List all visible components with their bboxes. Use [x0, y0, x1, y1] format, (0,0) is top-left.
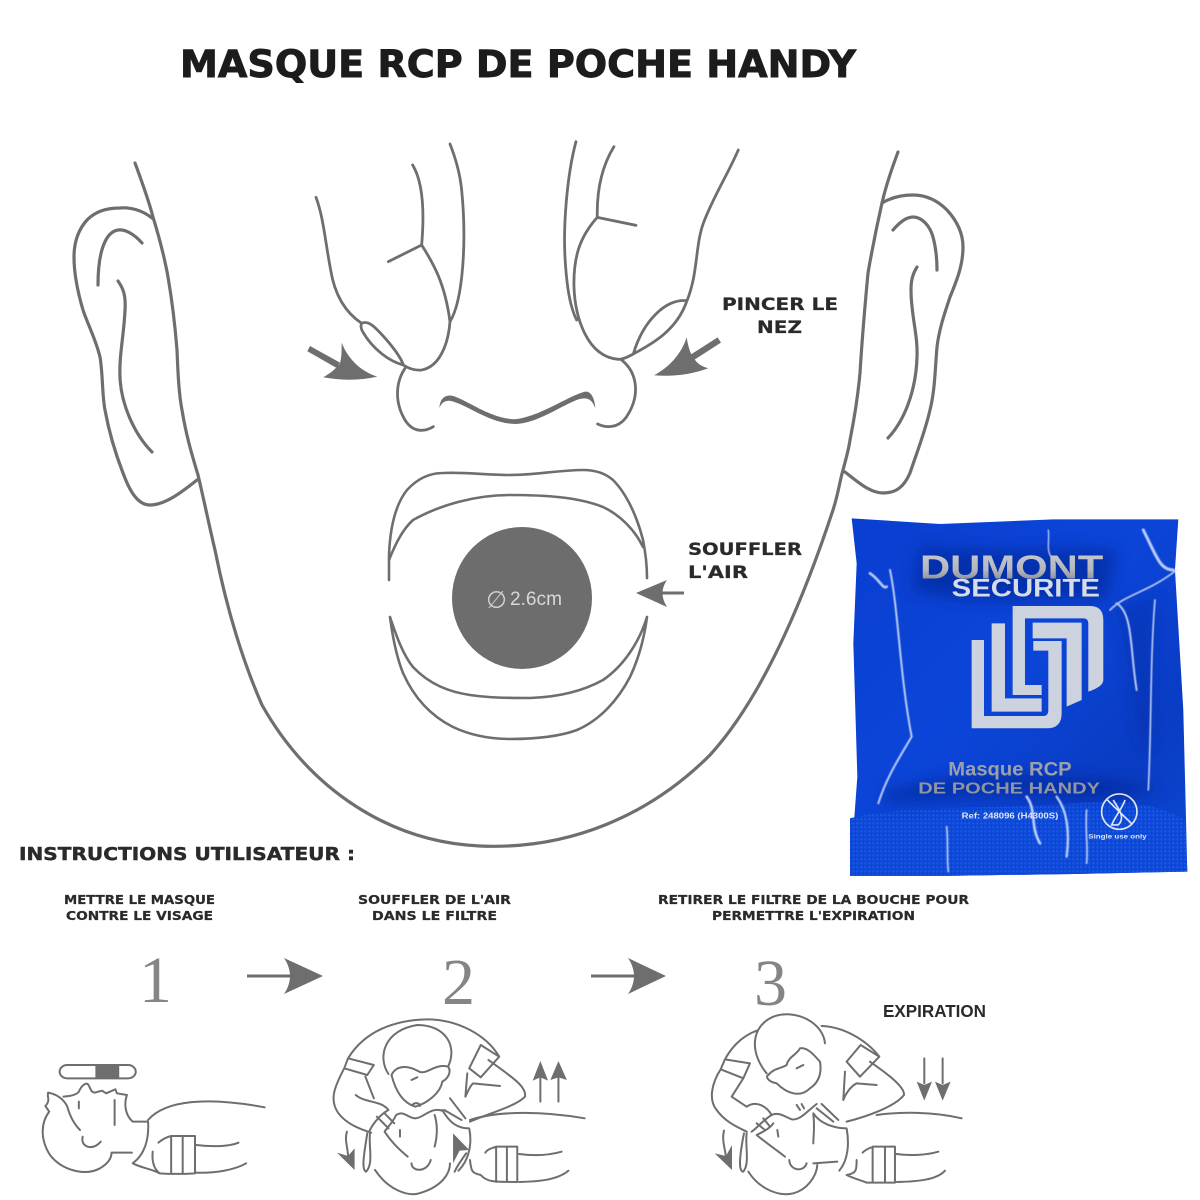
step 2 caption: DANS LE FILTRE: [372, 908, 497, 923]
label: souffler l'air: L'AIR: [688, 563, 748, 583]
nose: [397, 360, 636, 430]
fingers and nose: [307, 142, 738, 430]
step 2 caption: [358, 892, 511, 923]
single use symbol: [1088, 794, 1147, 840]
left pinch arrow: [307, 343, 377, 380]
brand name: SECURITE: [952, 575, 1100, 603]
dark shading: [883, 547, 1160, 803]
brand name: DUMONT: [920, 549, 1103, 586]
step number 1: 1: [139, 944, 172, 1017]
arrow 2 to 3: [591, 958, 666, 994]
patient and mask: [363, 1110, 585, 1194]
label: pincer le nez: NEZ: [757, 318, 802, 338]
rescuer: [334, 1019, 525, 1133]
blow arrow: [636, 580, 684, 607]
step 1 caption: [64, 892, 215, 923]
left ear: [74, 208, 197, 505]
down arrows: [917, 1058, 951, 1101]
reference: Ref: 248096 (H4300S): [962, 810, 1059, 820]
arrow 1 to 2: [247, 958, 323, 994]
instructions heading: INSTRUCTIONS UTILISATEUR :: [19, 845, 355, 865]
right pinch arrow: [654, 337, 721, 376]
patient and mask: [740, 1104, 962, 1194]
step 3 caption: [658, 892, 969, 923]
illustration: step 3 rescuer lifting away: [712, 1014, 962, 1194]
step 3 caption: RETIRER LE FILTRE DE LA BOUCHE POUR: [658, 892, 969, 907]
label: pincer le nez: PINCER LE: [722, 295, 838, 315]
step number 3: 3: [754, 947, 787, 1020]
step 1 caption: METTRE LE MASQUE: [64, 892, 215, 907]
product name: [918, 760, 1100, 797]
foil highlights: [870, 530, 1177, 872]
illustration: step 1 patient and mask: [43, 1065, 265, 1174]
product pouch: [850, 518, 1187, 876]
filter circle with diameter: ∅: [486, 586, 507, 614]
expiration label: EXPIRATION: [883, 1001, 986, 1021]
textured seal: [850, 802, 1187, 876]
pouch body: [850, 518, 1187, 876]
head tilt arrow: [715, 1131, 732, 1170]
step number 2: 2: [442, 946, 475, 1019]
left hand: [316, 144, 464, 370]
head tilt arrows: [337, 1132, 469, 1172]
folded mask: [60, 1065, 136, 1078]
up arrows: [533, 1061, 567, 1102]
right ear: [845, 195, 963, 493]
label: pincer le nez: [722, 295, 838, 338]
label: souffler l'air: [688, 540, 802, 583]
illustration: step 2 rescuer blowing: [334, 1019, 585, 1194]
right hand: [565, 142, 738, 359]
nostril line: [439, 392, 595, 424]
face outline: [135, 152, 898, 846]
filter circle with diameter: [452, 527, 592, 669]
single use symbol: Single use only: [1088, 833, 1147, 840]
product name: Masque RCP: [948, 760, 1072, 781]
step 1 caption: CONTRE LE VISAGE: [66, 908, 213, 923]
step 3 caption: PERMETTRE L'EXPIRATION: [712, 908, 915, 923]
product name: DE POCHE HANDY: [918, 780, 1100, 797]
mouth: [389, 470, 647, 739]
brand name: [920, 549, 1103, 603]
title: MASQUE RCP DE POCHE HANDY: [180, 43, 857, 86]
label: souffler l'air: SOUFFLER: [688, 540, 802, 560]
filter circle with diameter: 2.6cm: [510, 589, 562, 610]
patient: [43, 1084, 265, 1174]
rescuer: [712, 1014, 904, 1132]
face illustration: [74, 142, 963, 846]
step 2 caption: SOUFFLER DE L'AIR: [358, 892, 511, 907]
logo: [972, 606, 1103, 728]
